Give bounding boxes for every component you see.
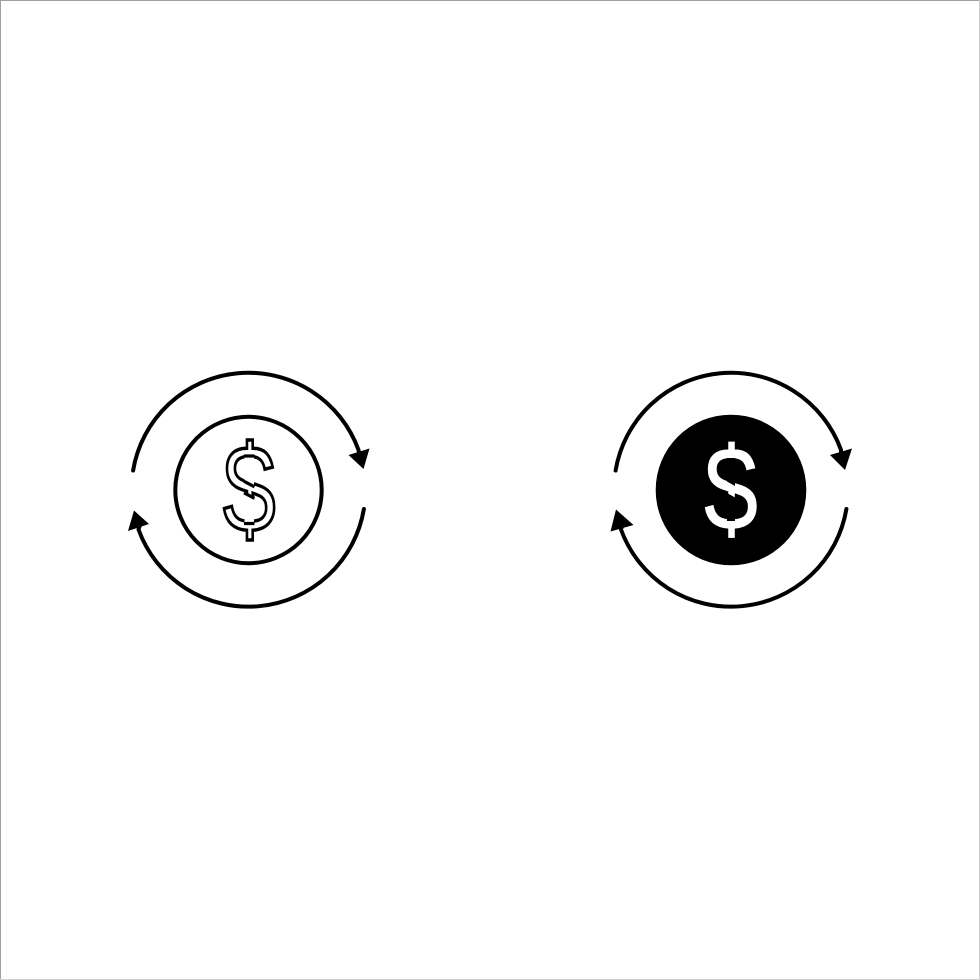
solid coin (656, 415, 806, 565)
dollar sign: $ (704, 422, 758, 555)
arrow: top clockwise arc (616, 373, 852, 470)
icon: outline dollar coin with circular arrows (128, 373, 370, 607)
dollar sign outline: $ (223, 422, 276, 558)
coin outline (175, 417, 322, 563)
icon: solid dollar coin with circular arrows (610, 373, 852, 607)
arrow: bottom clockwise arc (128, 509, 364, 607)
arrow: bottom clockwise arc (610, 509, 846, 607)
arrow: top clockwise arc (133, 373, 370, 470)
